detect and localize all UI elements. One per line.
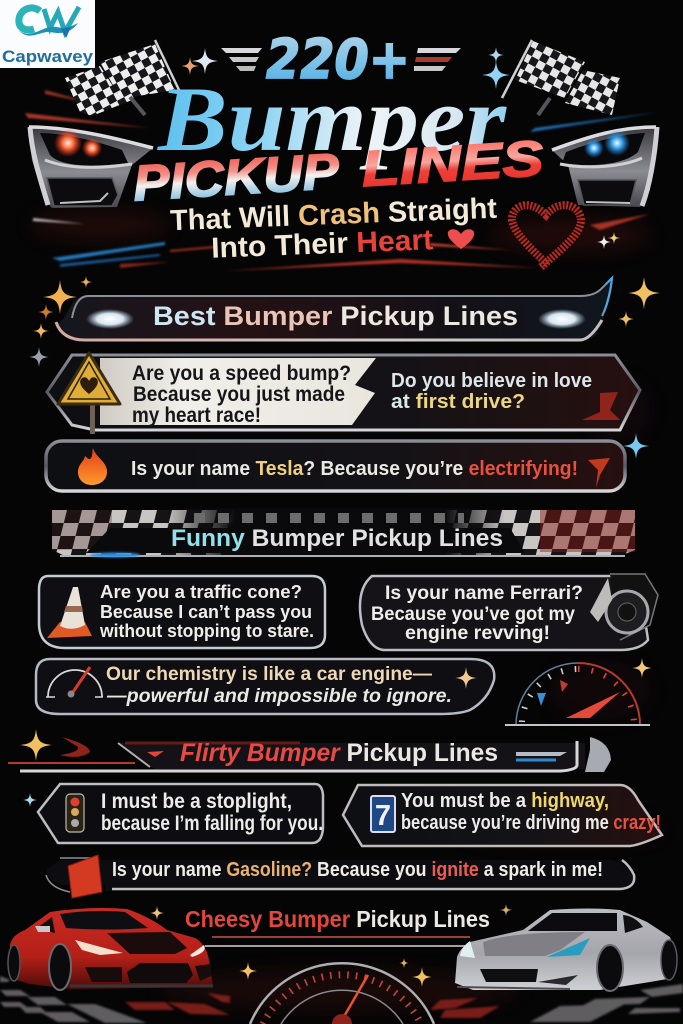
headline number stripes [221,48,461,71]
panel: chemistry [36,659,494,714]
panel: gasoline [46,855,634,898]
panel: best heading [56,278,612,340]
panel: highway [343,785,662,846]
silver sports car [455,908,677,991]
icon: small gauge [46,667,103,698]
checkered flags: right [502,40,620,115]
sparkle [310,593,350,595]
panel: flirty heading [8,729,611,772]
subtitle line one: That Will Crash Straight [170,193,498,237]
headline: Bumper: Bumper [157,68,507,170]
text: traffic cone: Because I can’t pass you [100,601,312,622]
section sparkles [29,276,660,459]
text: chemistry: Our chemistry is like a car engine— [106,664,432,685]
text: traffic cone: without stopping to stare. [99,620,314,641]
text: gasoline: Is your name Gasoline? Because you ignite a spark in me! [112,859,603,881]
icon: speedometer [505,658,652,725]
left headlight [28,127,153,208]
text: tesla line: Is your name Tesla? Because you’re electrifying! [131,458,578,480]
icon: route sign: 7 [375,800,391,832]
panel: chemistry: —powerful and impossible to ignore. [106,686,452,707]
red road reflections [125,993,500,1018]
headline: Pickup Lines [131,130,545,212]
text: speed bump: Because you just made [133,383,345,406]
footer sparkles [23,793,512,987]
icon: tire track heart [512,205,581,268]
right headlight [552,127,657,207]
icon: turbo [590,574,658,640]
text: stoplight: I must be a stoplight, [101,790,292,813]
heading text: Flirty Bumper Pickup Lines [180,739,498,767]
text: ferrari: Is your name Ferrari? [385,583,583,604]
text: stoplight: because I’m falling for you. [101,812,323,835]
panel: speed bump and first drive [47,353,640,434]
panel: funny heading [52,508,635,558]
subtitle line two: Into Their Heart [211,224,434,265]
heading: cheesy: Cheesy Bumper Pickup Lines [185,906,490,932]
logo mark [18,7,79,38]
led light left [86,309,134,329]
background glows [30,209,660,1010]
text: first drive: at first drive? [391,391,525,413]
tire mark decoration [582,392,620,420]
icon: warning sign [58,353,120,434]
icon: route sign [371,796,395,832]
header sparkles [181,47,620,249]
word: LINES: LINES [360,130,545,197]
bottom speedometer [250,963,434,1024]
text: first drive: Do you believe in love [391,370,592,392]
text: ferrari: Because you’ve got my [371,604,575,625]
logo: Capwavey [0,0,95,68]
icon: traffic light [66,794,84,832]
word: PICKUP: PICKUP [131,143,341,212]
text: ferrari: engine revving! [405,623,550,644]
icon: flame [78,448,107,485]
text: traffic cone [99,581,314,641]
paper note [100,358,376,425]
panel: traffic cone [39,576,350,648]
icon: fuel can [68,855,102,898]
icon: small heart [448,229,474,249]
text: speed bump: my heart race! [132,404,261,427]
text: highway [401,789,661,834]
text: ferrari [371,583,583,644]
heading text: Funny Bumper Pickup Lines [171,525,503,552]
text: first drive [391,370,592,413]
icon: cone [47,587,92,638]
checkered flags: left [65,40,180,116]
text: speed bump: Are you a speed bump? [132,362,351,385]
text: highway: You must be a highway, [401,789,609,812]
decorative header streaks [25,90,660,271]
text: traffic cone: Are you a traffic cone? [100,581,302,602]
red sports car [8,908,213,990]
road markings [0,976,683,1023]
heading text: Best Bumper Pickup Lines [153,301,518,331]
headline: 220+: 220+ [266,28,410,91]
panel: stoplight [38,784,323,843]
led light right [538,309,586,329]
logo wordmark: Capwavey [2,47,94,66]
text: highway: because you’re driving me crazy! [401,811,661,834]
subtitle [170,193,499,266]
text: stoplight [101,790,323,835]
text: speed bump [132,362,351,427]
panel: tesla [46,441,625,491]
panel: ferrari [360,574,658,650]
sparkle [455,667,477,689]
